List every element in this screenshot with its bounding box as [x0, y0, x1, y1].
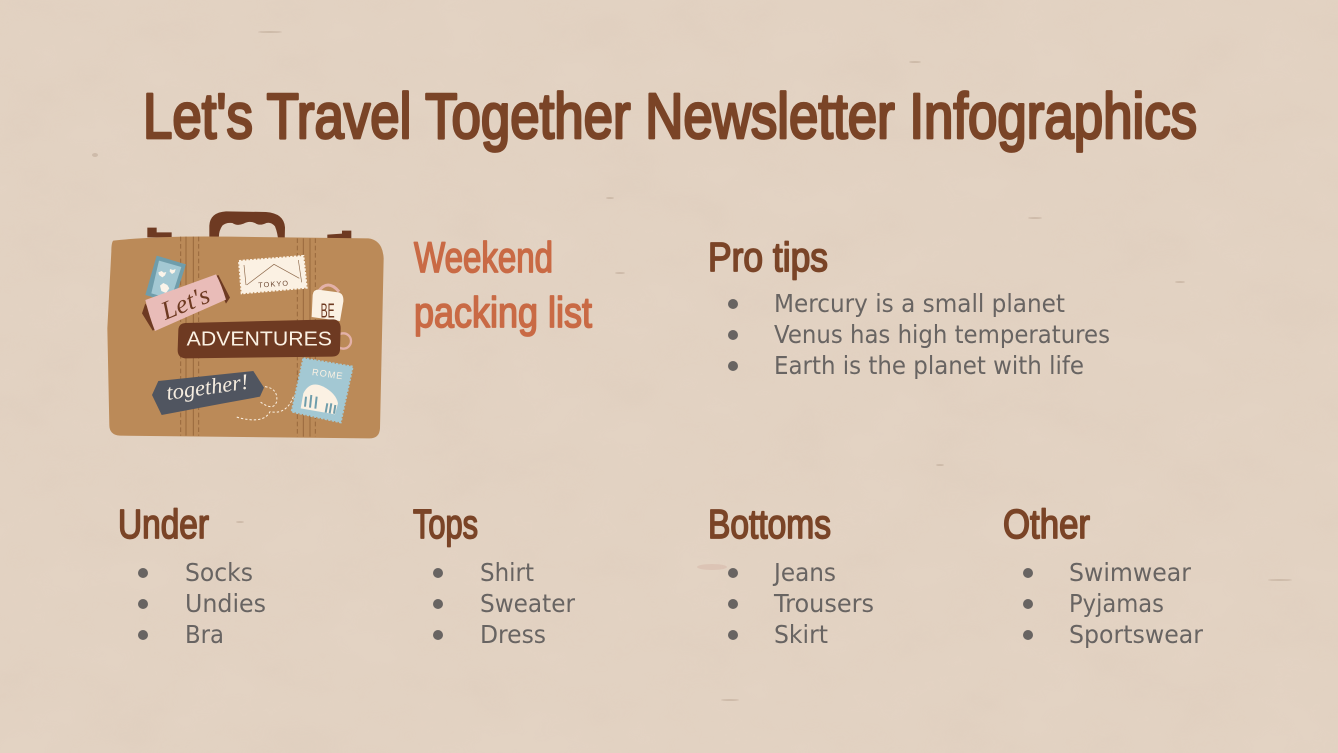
- heading: pro tips: Pro tips: [708, 234, 828, 280]
- list: bottoms: Skirt: [774, 620, 828, 649]
- sticker: Tokyo stamp: [239, 256, 307, 293]
- panel: bottoms: [708, 501, 874, 649]
- heading: under: Under: [118, 501, 209, 547]
- sticker: together ticket: together!: [165, 369, 250, 405]
- heading: Weekend packing list: Weekend: [414, 234, 553, 282]
- sticker ring: [336, 333, 351, 349]
- dashed route: [235, 387, 293, 420]
- list: other: Sportswear: [1069, 620, 1204, 649]
- sticker: hearts photo: [145, 256, 186, 303]
- list: tops: Dress: [480, 620, 546, 649]
- list: under: Bra: [185, 620, 224, 649]
- suitcase latches: [147, 228, 351, 239]
- label: Adventures: ADVENTURES: [187, 329, 332, 351]
- sticker: Let's: Let's: [156, 280, 214, 326]
- sticker: Be tag: [312, 285, 343, 323]
- panel: pro tips: [708, 234, 1110, 380]
- suitcase straps: [181, 237, 315, 437]
- list: under: Undies: [185, 589, 266, 618]
- panel: tops: [413, 501, 576, 649]
- list: tops: Sweater: [480, 589, 576, 618]
- list: under: Socks: [185, 558, 253, 587]
- list: bottoms: Trousers: [773, 589, 874, 618]
- list: under: [138, 558, 266, 649]
- sticker: Tokyo stamp: TOKYO: [258, 279, 289, 290]
- list: pro tips: Mercury is a small planet: [774, 289, 1065, 318]
- sticker: Let's: [142, 274, 230, 331]
- list: other: [1023, 558, 1204, 649]
- suitcase body: [107, 236, 384, 438]
- heading: Weekend packing list: [414, 234, 592, 337]
- list: pro tips: Venus has high temperatures: [774, 320, 1110, 349]
- sticker: together ticket: [152, 369, 264, 415]
- sticker: Be tag: BE: [321, 301, 335, 323]
- panel: under: [118, 501, 266, 649]
- list: tops: Shirt: [480, 558, 534, 587]
- list: other: Swimwear: [1069, 558, 1192, 587]
- sticker: Rome stamp: ROME: [311, 367, 343, 381]
- sticker: Rome stamp: [292, 358, 353, 422]
- heading: tops: Tops: [413, 501, 478, 547]
- list: tops: [433, 558, 576, 649]
- heading: other: Other: [1003, 501, 1090, 547]
- label: Adventures: [178, 319, 341, 358]
- heading: Weekend packing list: packing list: [414, 289, 592, 337]
- list: other: Pyjamas: [1069, 589, 1164, 618]
- list: pro tips: [728, 289, 1110, 380]
- icon: suitcase with travel stickers: [107, 211, 384, 438]
- heading: bottoms: Bottoms: [708, 501, 831, 547]
- list: bottoms: Jeans: [772, 558, 836, 587]
- list: bottoms: [728, 558, 874, 649]
- panel: other: [1003, 501, 1204, 649]
- suitcase handle: [209, 211, 285, 241]
- list: pro tips: Earth is the planet with life: [774, 351, 1084, 380]
